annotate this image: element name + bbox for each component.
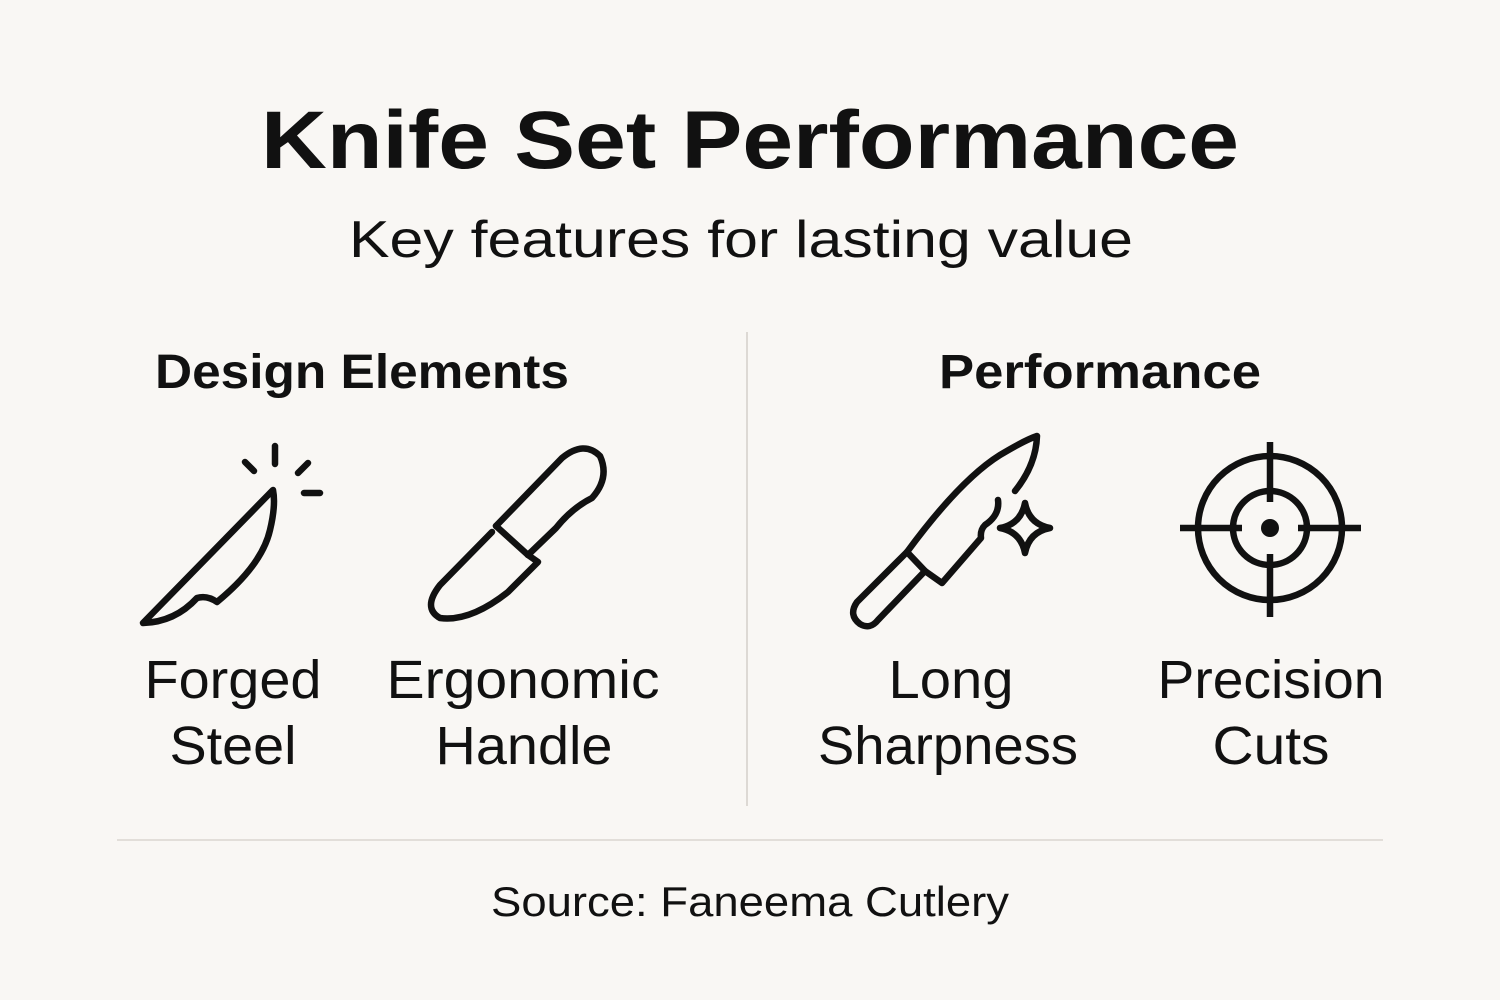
label: long sharpness: Long	[888, 650, 1014, 710]
title: Knife Set Performance	[261, 95, 1239, 186]
panel: performance	[818, 346, 1384, 776]
icon: forged steel	[143, 446, 320, 623]
label: long sharpness: Sharpness	[818, 716, 1078, 776]
icon: ergonomic handle	[431, 448, 604, 618]
icon: target	[1180, 442, 1361, 617]
heading: design elements: Design Elements	[155, 346, 569, 399]
subtitle: Key features for lasting value	[349, 211, 1133, 269]
heading: performance: Performance	[939, 346, 1261, 399]
panel: design elements	[143, 346, 660, 776]
icon: long sharpness	[853, 436, 1050, 626]
label: long sharpness	[818, 650, 1078, 776]
label: forged steel: Forged	[144, 650, 322, 710]
source: Source: Faneema Cutlery	[491, 878, 1009, 925]
label: forged steel: Steel	[170, 716, 296, 776]
label: precision cuts	[1158, 650, 1384, 776]
label: ergonomic handle	[386, 650, 660, 776]
label: forged steel	[144, 650, 322, 776]
label: ergonomic handle: Handle	[436, 716, 612, 776]
label: precision cuts: Cuts	[1212, 716, 1330, 776]
label: precision cuts: Precision	[1158, 650, 1384, 710]
label: ergonomic handle: Ergonomic	[386, 650, 660, 710]
